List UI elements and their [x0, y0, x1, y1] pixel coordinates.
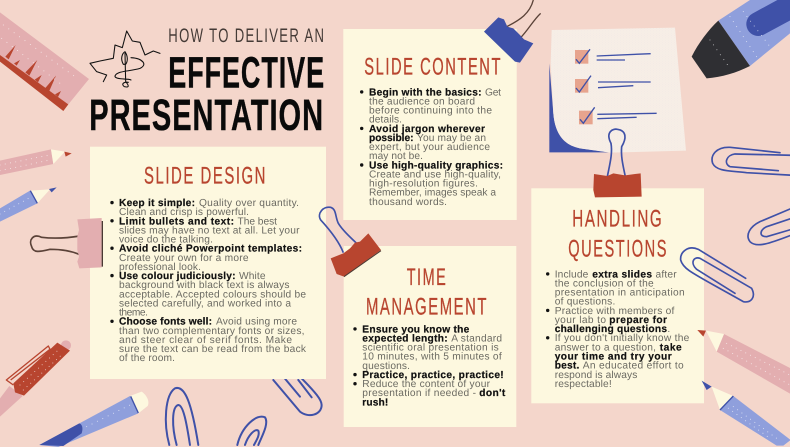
bullet list: slide design: of the room. [119, 353, 175, 364]
icon: middle paperclip [681, 248, 753, 302]
bullet list: slide content: Create and use high-quality, [369, 170, 501, 180]
bullet list: handling questions: respond is always [555, 370, 637, 381]
bullet list: time management: scientific oral presentation is [362, 343, 499, 354]
title [89, 25, 325, 140]
bullet list: time management: questions. [362, 361, 410, 372]
bullet list: slide content: Begin with the basics: [369, 87, 482, 98]
panel: time management [344, 246, 516, 427]
bullet list: slide content: Use high-quality graphics: [369, 160, 503, 171]
icon: blue pen [39, 392, 148, 447]
icon: paperclip bottom middle [237, 417, 266, 445]
bullet list: slide design: voice do the talking. [119, 234, 213, 246]
bullet list: slide content: expert, but your audience [369, 142, 490, 153]
bullet list: time management: don't [479, 388, 506, 399]
bullet list: time management: Ensure you know the [362, 324, 470, 335]
icon: pink pencil left [0, 149, 72, 175]
bullet list: handling questions: prepare for [609, 315, 667, 326]
bullet list: time management: rush! [362, 397, 388, 408]
heading: slide design: SLIDE DESIGN [144, 162, 267, 189]
panel: slide design [90, 147, 326, 379]
bullet list: slide content: high-resolution figures. [369, 179, 478, 190]
bullet list: slide content: details. [369, 115, 402, 126]
bullet list: slide design: selected carefully, and worked into a [119, 298, 291, 309]
bullet list: handling questions: Practice with members of [555, 306, 674, 317]
bullet list: slide design: theme. [119, 308, 148, 319]
bullet list: time management: presentation if needed - [362, 388, 476, 399]
icon: pink binder clip [31, 218, 102, 268]
panel: slide content [343, 29, 517, 220]
icon: paperclip right lower [748, 208, 790, 245]
bullet list: slide design: The best [238, 216, 277, 227]
bullet list: slide content: Remember, images speak a [369, 188, 496, 199]
bullet list: slide design: Avoid cliché Powerpoint templates: [119, 244, 302, 255]
bullet list: slide content: may not be. [369, 151, 423, 162]
bullet list: slide design: Use colour judiciously: [119, 271, 236, 282]
bullet list: slide design: professional look. [119, 262, 201, 273]
heading: handling questions: HANDLING [572, 205, 663, 232]
icon: checkbox row 3 [579, 107, 657, 124]
bullet list: handling questions: challenging questions [555, 324, 667, 335]
bullet list: handling questions: best. [555, 361, 579, 372]
icon: blue pencil right [702, 381, 790, 446]
icon: checkbox row 1 [575, 49, 651, 64]
heading: handling questions: QUESTIONS [568, 235, 668, 262]
bullet list: slide design: Quality over quantity. [199, 198, 299, 209]
bullet list: slide design: sure the text can be read from the back [119, 344, 307, 355]
icon: marker [692, 0, 790, 78]
icon: red binder clip [319, 207, 381, 277]
icon: paperclip bottom left [166, 388, 198, 445]
bullet list: slide design: and steer clear of serif fonts. Make [119, 335, 292, 346]
bullet list: handling questions: after [656, 269, 677, 280]
panel: handling questions [531, 188, 704, 403]
bullet list: slide design: Create your own for a more [119, 253, 249, 264]
bullet list: slide content: You may be an [417, 133, 486, 144]
icon: blue pencil left [0, 187, 57, 222]
bullet list: slide content: Avoid jargon wherever [369, 124, 485, 135]
icon: red pen [0, 340, 71, 417]
bullet list: slide design: Choose fonts well: [119, 317, 212, 328]
bullet list: handling questions: your time and try your [555, 352, 672, 362]
bullet list: slide content [360, 87, 503, 208]
bullet list: slide content: Get [485, 87, 501, 98]
icon: top binder clip on handling questions [593, 129, 642, 197]
heading: time management: MANAGEMENT [366, 294, 488, 321]
bullet list: handling questions: the conclusion of the [555, 278, 654, 289]
bullet list: time management: Reduce the content of your [362, 379, 491, 390]
bullet list: handling questions: extra slides [592, 269, 652, 280]
heading: handling questions [568, 205, 668, 262]
bullet list: slide design: Avoid using more [216, 317, 297, 328]
icon: blue binder clip [484, 0, 541, 63]
bullet list: time management: Practice, practice, practice! [362, 370, 504, 381]
bullet list: slide design [110, 198, 307, 364]
bullet list: slide content: before continuing into the [369, 106, 492, 117]
icon: pink pencil right [697, 330, 790, 394]
bullet list: slide content: the audience on board [369, 96, 475, 107]
heading: time management [366, 264, 488, 321]
bullet list: slide design: Limit bullets and text: [119, 216, 234, 227]
bullet list: time management: expected length: [362, 333, 448, 344]
icon: leaf logo [90, 31, 160, 87]
bullet list: handling questions: An educated effort to [583, 361, 684, 372]
bullet list: time management [353, 324, 506, 408]
bullet list: handling questions: take [660, 342, 682, 353]
bullet list: slide design: background with black text is always [119, 280, 290, 291]
title: HOW TO DELIVER AN [168, 25, 325, 47]
bullet list: slide design: acceptable. Accepted colours should be [119, 289, 306, 300]
bullet list: handling questions: respectable! [555, 379, 612, 390]
bullet list: handling questions: your lab to [555, 315, 606, 326]
bullet list: slide design: than two complementary fonts or sizes, [119, 326, 304, 337]
title: PRESENTATION [89, 91, 324, 140]
bullet list: handling questions: presentation in anticipation [555, 288, 685, 299]
bullet list: handling questions: Include [555, 269, 589, 280]
icon: checkbox row 2 [575, 76, 651, 93]
icon: checklist note [549, 28, 686, 153]
bullet list: slide design: White [239, 271, 266, 282]
heading: slide content: SLIDE CONTENT [364, 54, 502, 81]
icon: paperclip right upper [712, 147, 790, 175]
bullet list: time management: A standard [451, 333, 502, 344]
bullet list: slide content: possible: [369, 133, 414, 144]
bullet list: slide design: Clean and crisp is powerful. [119, 207, 249, 218]
bullet list: handling questions: answer to a question, [555, 342, 656, 353]
bullet list: handling questions: of questions. [555, 297, 615, 308]
bullet list: time management: 10 minutes, with 5 minutes of [362, 352, 502, 363]
bullet list: handling questions [546, 269, 690, 390]
bullet list: slide design: Keep it simple: [119, 198, 195, 209]
title: EFFECTIVE [168, 48, 325, 97]
bullet list: handling questions: If you don't initially know the [555, 333, 690, 344]
icon: paperclip under slide design [273, 373, 322, 415]
heading: time management: TIME [407, 264, 447, 291]
bullet list: slide content: thousand words. [369, 197, 447, 208]
icon: ruler [0, 12, 89, 111]
bullet list: slide design: slides may have no text at all. Let your [119, 225, 300, 236]
bullet list: handling questions: . [667, 324, 670, 335]
